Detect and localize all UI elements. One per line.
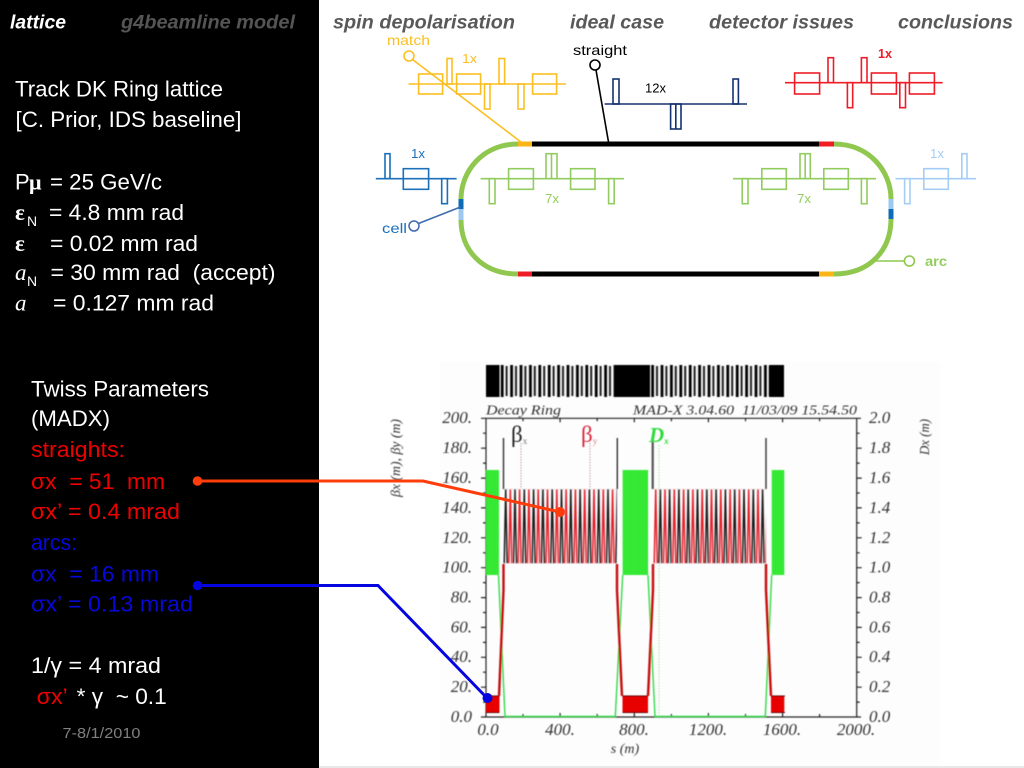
nav item: lattice: lattice [10, 12, 66, 34]
normalised emittance [15, 200, 184, 229]
right axis title: Dx (m) [918, 419, 933, 456]
straights values: σx’ = 0.4 mrad [31, 499, 180, 524]
x axis labels: 800. [619, 720, 649, 739]
acceptance: a [15, 290, 26, 316]
ring [461, 144, 891, 274]
left black panel [0, 0, 319, 768]
normalised emittance: N [27, 213, 37, 229]
match cell [404, 51, 566, 142]
x axis labels: 0.0 [477, 720, 499, 739]
sigma gamma product: σx’ [37, 684, 68, 709]
plot image backdrop [440, 362, 940, 766]
acceptance: = 0.127 mm rad [53, 290, 214, 316]
match label: match [387, 32, 430, 48]
x axis labels: 400. [545, 720, 575, 739]
normalised emittance: ε [15, 200, 25, 225]
beta function straights [503, 489, 766, 563]
sigma gamma product: * γ ~ 0.1 [77, 684, 167, 709]
nav item: g4beamline model: g4beamline model [120, 12, 296, 34]
arcs values: σx’ = 0.13 mrad [31, 592, 193, 616]
inverse gamma: 1/γ = 4 mrad [31, 653, 161, 678]
left axis labels: 80. [451, 588, 472, 606]
x axis title: s (m) [611, 742, 640, 757]
emittance: ε [15, 231, 25, 256]
dispersion curve [486, 445, 784, 716]
sigma gamma product [37, 684, 167, 709]
beta y label: β [581, 422, 593, 447]
cell pointer [409, 207, 460, 231]
diagram: ring lattice [376, 32, 976, 274]
straight multiplicity: 12x [645, 80, 666, 96]
straights values: σx = 51 mm [31, 469, 165, 494]
momentum: = 25 GeV/c [50, 170, 162, 194]
normalised acceptance: a [15, 260, 26, 285]
light blue multiplicity: 1x [930, 146, 945, 161]
left axis labels [442, 408, 472, 726]
straight label: straight [573, 42, 627, 58]
x axis labels: 1600. [763, 720, 801, 739]
match multiplicity: 1x [462, 51, 478, 66]
beta function arcs and transitions [486, 564, 785, 712]
nav item: conclusions: conclusions [898, 12, 1013, 34]
straights values [31, 437, 180, 524]
dark blue multiplicity: 1x [411, 146, 426, 161]
left axis labels: 100. [442, 558, 472, 576]
right axis labels: 1.8 [869, 438, 891, 457]
x axis labels [477, 720, 875, 739]
left axis labels: 0.0 [451, 707, 472, 726]
x axis labels: 1200. [689, 720, 727, 739]
red multiplicity: 1x [878, 46, 893, 61]
cell label: cell [382, 220, 407, 236]
right axis labels: 2.0 [869, 408, 891, 427]
nav item: spin depolarisation: spin depolarisation [333, 12, 515, 34]
dark blue dispersion cell [376, 154, 457, 204]
lattice title: Track DK Ring lattice [15, 77, 223, 102]
left axis title: βx (m), βy (m) [389, 419, 404, 498]
left arc cell [481, 154, 624, 204]
left axis labels: 200. [442, 408, 472, 427]
right axis labels: 0.8 [869, 588, 891, 606]
arcs values: σx = 16 mm [31, 562, 159, 586]
left axis labels: 60. [451, 618, 472, 636]
text block: lattice parameters [15, 77, 276, 316]
emittance: = 0.02 mm rad [50, 231, 198, 256]
beta label pointers [521, 443, 590, 489]
x axis labels: 2000. [837, 720, 875, 739]
normalised acceptance: = 30 mm rad (accept) [50, 260, 276, 285]
right axis labels: 0.4 [869, 647, 891, 666]
straights values: straights: [31, 437, 125, 462]
lattice element strip [486, 365, 784, 397]
momentum: μ [29, 170, 42, 194]
MADX label: (MADX) [31, 406, 110, 431]
chart: MAD-X Twiss plot [389, 365, 933, 757]
right axis labels: 1.2 [869, 528, 891, 547]
normalised acceptance: N [27, 273, 37, 289]
left axis labels: 140. [442, 498, 472, 517]
nav item: ideal case: ideal case [570, 12, 664, 34]
callout: straights beta pointer [193, 476, 565, 517]
beta x label: x [523, 436, 528, 446]
beta x label: β [511, 422, 523, 447]
callout: arcs beta pointer [193, 581, 492, 703]
navigation bar [10, 12, 1013, 34]
normalised emittance: = 4.8 mm rad [49, 200, 184, 225]
beta y label: y [593, 436, 598, 446]
left arc multiplicity: 7x [545, 191, 560, 206]
left axis labels: 180. [442, 438, 472, 457]
right axis labels: 0.0 [869, 707, 891, 726]
nav item: detector issues: detector issues [709, 12, 854, 34]
left axis labels: 160. [442, 468, 472, 487]
axes frame and ticks [481, 418, 862, 717]
left axis labels: 120. [442, 528, 472, 547]
plot header right: MAD-X 3.04.60 11/03/09 15.54.50 [632, 404, 857, 418]
dispersion label: D [649, 423, 664, 447]
momentum: P [15, 170, 30, 194]
arcs values [31, 530, 193, 616]
text block: Twiss parameters [31, 377, 209, 709]
dispersion label: x [663, 436, 669, 446]
red match cell [785, 58, 943, 108]
bottom edge line [319, 766, 1024, 768]
right arc cell [733, 154, 876, 204]
right axis labels: 0.6 [869, 618, 891, 636]
Twiss heading: Twiss Parameters [31, 377, 209, 402]
light blue dispersion cell [896, 154, 976, 204]
date: 7-8/1/2010 [62, 726, 140, 742]
right axis labels: 1.0 [869, 558, 891, 576]
beta peaks [504, 438, 766, 489]
arc pointer [875, 256, 914, 266]
plot header left: Decay Ring [485, 404, 561, 418]
right axis labels [869, 408, 891, 726]
lattice reference: [C. Prior, IDS baseline] [16, 107, 242, 132]
right axis labels: 1.4 [869, 498, 891, 517]
straight cell [605, 79, 747, 129]
right axis labels: 0.2 [869, 677, 891, 696]
arc label: arc [925, 253, 947, 269]
straight pointer [590, 60, 608, 142]
right arc multiplicity: 7x [797, 191, 812, 206]
left axis labels: 20. [451, 677, 472, 696]
right axis labels: 1.6 [869, 468, 891, 487]
left axis labels: 40. [451, 647, 472, 666]
arcs values: arcs: [31, 530, 77, 555]
